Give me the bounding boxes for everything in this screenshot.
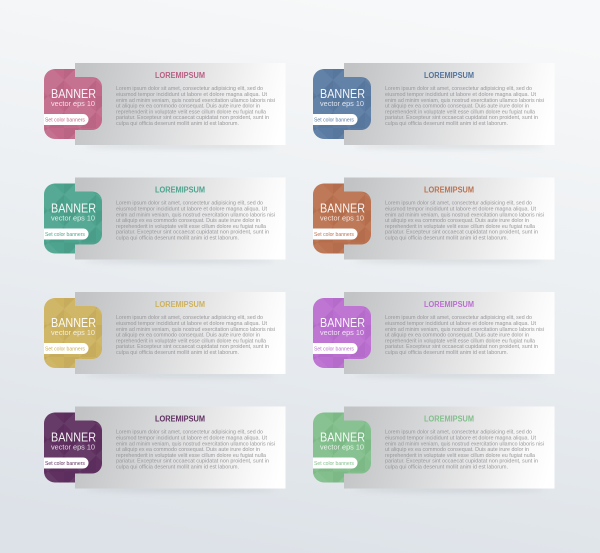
body text: ut aliquip ex ea commodo consequat. Duis aute irure dolor in — [116, 104, 260, 110]
body text: culpa qui officia deserunt mollit anim id est laborum. — [116, 464, 239, 470]
badge back — [44, 69, 94, 139]
body text: enim ad minim veniam, quis nostrud exercitation ullamco laboris nisi — [385, 441, 544, 447]
badge heading: BANNER — [51, 202, 96, 216]
body text: ut aliquip ex ea commodo consequat. Duis aute irure dolor in — [116, 218, 260, 224]
card shadow — [354, 487, 544, 492]
pill — [44, 458, 89, 468]
pill: Set color banners — [314, 118, 354, 124]
body text: culpa qui officia deserunt mollit anim id est laborum. — [385, 464, 508, 470]
pill: Set color banners — [314, 232, 354, 238]
body text: pariatur. Excepteur sint occaecat cupidatat non proident, sunt in — [385, 344, 538, 350]
title: LOREMIPSUM — [424, 414, 474, 424]
body text: Lorem ipsum dolor sit amet, consectetur adipisicing elit, sed do — [385, 86, 532, 92]
text panel — [344, 178, 554, 260]
body text — [116, 86, 275, 127]
pill: Set color banners — [45, 346, 85, 352]
body text: pariatur. Excepteur sint occaecat cupidatat non proident, sunt in — [116, 115, 269, 121]
pill: Set color banners — [45, 461, 85, 467]
card shadow — [85, 144, 275, 148]
title: LOREMIPSUM — [424, 71, 474, 80]
text panel — [344, 292, 554, 374]
body text — [385, 315, 544, 356]
pill: Set color banners — [45, 232, 85, 238]
banner: teal — [44, 178, 286, 263]
body text: Lorem ipsum dolor sit amet, consectetur adipisicing elit, sed do — [385, 200, 532, 206]
title: LOREMIPSUM — [155, 71, 205, 80]
badge front — [344, 420, 371, 474]
pill — [313, 458, 358, 468]
text panel — [344, 63, 554, 145]
body text: Lorem ipsum dolor sit amet, consectetur adipisicing elit, sed do — [116, 315, 263, 321]
banner: blue — [313, 63, 554, 148]
badge front — [75, 306, 102, 359]
body text: eiusmod tempor incididunt ut labore et dolore magna aliqua. Ut — [385, 92, 536, 98]
badge subheading: vector eps 10 — [51, 442, 95, 452]
body text: culpa qui officia deserunt mollit anim id est laborum. — [385, 121, 508, 127]
body text: ut aliquip ex ea commodo consequat. Duis aute irure dolor in — [116, 333, 260, 339]
badge subheading: vector eps 10 — [320, 442, 364, 452]
body text — [385, 86, 544, 127]
pill: Set color banners — [314, 461, 354, 467]
body text: ut aliquip ex ea commodo consequat. Duis aute irure dolor in — [385, 447, 529, 453]
body text: ut aliquip ex ea commodo consequat. Duis aute irure dolor in — [116, 447, 260, 453]
text panel — [344, 406, 554, 488]
card shadow — [85, 258, 275, 263]
badge front — [75, 192, 102, 244]
body text: eiusmod tempor incididunt ut labore et dolore magna aliqua. Ut — [385, 321, 536, 327]
badge front — [75, 77, 102, 130]
pill — [313, 343, 358, 354]
badge heading: BANNER — [320, 430, 365, 444]
body text: Lorem ipsum dolor sit amet, consectetur adipisicing elit, sed do — [385, 315, 532, 321]
badge heading: BANNER — [320, 316, 365, 330]
title: LOREMIPSUM — [155, 414, 205, 424]
body text: culpa qui officia deserunt mollit anim id est laborum. — [385, 350, 508, 356]
body text: Lorem ipsum dolor sit amet, consectetur adipisicing elit, sed do — [116, 200, 263, 206]
badge subheading: vector eps 10 — [320, 99, 364, 108]
body text: enim ad minim veniam, quis nostrud exercitation ullamco laboris nisi — [116, 327, 275, 333]
body text: ut aliquip ex ea commodo consequat. Duis aute irure dolor in — [385, 218, 529, 224]
banner: pink — [44, 63, 286, 148]
card shadow — [354, 372, 544, 378]
body text: reprehenderit in voluptate velit esse cillum dolore eu fugiat nulla — [385, 109, 536, 115]
body text: pariatur. Excepteur sint occaecat cupidatat non proident, sunt in — [116, 344, 269, 350]
badge back — [44, 184, 94, 254]
pill: Set color banners — [45, 118, 85, 124]
body text: reprehenderit in voluptate velit esse cillum dolore eu fugiat nulla — [116, 338, 267, 344]
body text: reprehenderit in voluptate velit esse cillum dolore eu fugiat nulla — [116, 109, 267, 115]
body text: Lorem ipsum dolor sit amet, consectetur adipisicing elit, sed do — [116, 430, 263, 436]
pill: Set color banners — [314, 346, 354, 352]
title: LOREMIPSUM — [155, 186, 205, 194]
badge front — [75, 420, 102, 474]
body text: enim ad minim veniam, quis nostrud exercitation ullamco laboris nisi — [116, 441, 275, 447]
body text — [385, 200, 544, 242]
banner: green — [313, 406, 554, 492]
text panel — [75, 406, 286, 488]
badge heading: BANNER — [51, 430, 96, 444]
body text: pariatur. Excepteur sint occaecat cupidatat non proident, sunt in — [385, 115, 538, 121]
badge subheading: vector eps 10 — [51, 328, 95, 337]
badge back — [313, 298, 363, 368]
body text — [116, 430, 275, 470]
banner: gold — [44, 292, 286, 378]
badge heading: BANNER — [51, 87, 96, 101]
pill — [44, 228, 89, 240]
badge back — [313, 412, 363, 482]
text panel — [75, 178, 286, 260]
body text: culpa qui officia deserunt mollit anim id est laborum. — [385, 236, 508, 242]
pill — [313, 228, 358, 240]
pill — [313, 114, 358, 125]
body text: eiusmod tempor incididunt ut labore et dolore magna aliqua. Ut — [385, 206, 536, 212]
badge heading: BANNER — [320, 87, 365, 101]
body text: Lorem ipsum dolor sit amet, consectetur adipisicing elit, sed do — [385, 430, 532, 436]
body text: pariatur. Excepteur sint occaecat cupidatat non proident, sunt in — [385, 230, 538, 236]
badge front — [344, 192, 371, 244]
badge back — [44, 298, 94, 368]
body text: eiusmod tempor incididunt ut labore et dolore magna aliqua. Ut — [116, 92, 267, 98]
body text: pariatur. Excepteur sint occaecat cupidatat non proident, sunt in — [385, 459, 538, 465]
body text: pariatur. Excepteur sint occaecat cupidatat non proident, sunt in — [116, 459, 269, 465]
body text: enim ad minim veniam, quis nostrud exercitation ullamco laboris nisi — [385, 212, 544, 218]
badge back — [313, 184, 363, 254]
body text: reprehenderit in voluptate velit esse cillum dolore eu fugiat nulla — [385, 338, 536, 344]
body text: eiusmod tempor incididunt ut labore et dolore magna aliqua. Ut — [116, 436, 267, 442]
badge subheading: vector eps 10 — [320, 214, 364, 222]
badge back — [313, 69, 363, 139]
banner: violet — [313, 292, 554, 378]
badge front — [344, 306, 371, 359]
body text: reprehenderit in voluptate velit esse cillum dolore eu fugiat nulla — [385, 453, 536, 459]
card shadow — [85, 487, 275, 492]
badge front — [344, 77, 371, 130]
banner: orange — [313, 178, 554, 263]
banner: dark plum — [44, 406, 286, 492]
body text: eiusmod tempor incididunt ut labore et dolore magna aliqua. Ut — [385, 436, 536, 442]
body text: reprehenderit in voluptate velit esse cillum dolore eu fugiat nulla — [116, 453, 267, 459]
body text: culpa qui officia deserunt mollit anim id est laborum. — [116, 350, 239, 356]
body text: eiusmod tempor incididunt ut labore et dolore magna aliqua. Ut — [116, 321, 267, 327]
body text: enim ad minim veniam, quis nostrud exercitation ullamco laboris nisi — [116, 98, 275, 104]
body text: culpa qui officia deserunt mollit anim id est laborum. — [116, 236, 239, 242]
body text: ut aliquip ex ea commodo consequat. Duis aute irure dolor in — [385, 104, 529, 110]
pill — [44, 114, 89, 125]
body text: eiusmod tempor incididunt ut labore et dolore magna aliqua. Ut — [116, 206, 267, 212]
badge back — [44, 412, 94, 482]
title: LOREMIPSUM — [424, 186, 474, 194]
body text: pariatur. Excepteur sint occaecat cupidatat non proident, sunt in — [116, 230, 269, 236]
body text — [385, 430, 544, 470]
body text: enim ad minim veniam, quis nostrud exercitation ullamco laboris nisi — [116, 212, 275, 218]
card shadow — [85, 372, 275, 378]
badge subheading: vector eps 10 — [51, 99, 95, 108]
body text: enim ad minim veniam, quis nostrud exercitation ullamco laboris nisi — [385, 327, 544, 333]
body text: ut aliquip ex ea commodo consequat. Duis aute irure dolor in — [385, 333, 529, 339]
body text: reprehenderit in voluptate velit esse cillum dolore eu fugiat nulla — [385, 224, 536, 230]
badge heading: BANNER — [51, 316, 96, 330]
card shadow — [354, 258, 544, 263]
body text: enim ad minim veniam, quis nostrud exercitation ullamco laboris nisi — [385, 98, 544, 104]
body text — [116, 315, 275, 356]
pill — [44, 343, 89, 354]
title: LOREMIPSUM — [424, 300, 474, 309]
badge subheading: vector eps 10 — [51, 214, 95, 222]
text panel — [75, 292, 286, 374]
badge subheading: vector eps 10 — [320, 328, 364, 337]
badge heading: BANNER — [320, 202, 365, 216]
title: LOREMIPSUM — [155, 300, 205, 309]
body text — [116, 200, 275, 242]
card shadow — [354, 144, 544, 148]
text panel — [75, 63, 286, 145]
body text: Lorem ipsum dolor sit amet, consectetur adipisicing elit, sed do — [116, 86, 263, 92]
body text: reprehenderit in voluptate velit esse cillum dolore eu fugiat nulla — [116, 224, 267, 230]
body text: culpa qui officia deserunt mollit anim id est laborum. — [116, 121, 239, 127]
